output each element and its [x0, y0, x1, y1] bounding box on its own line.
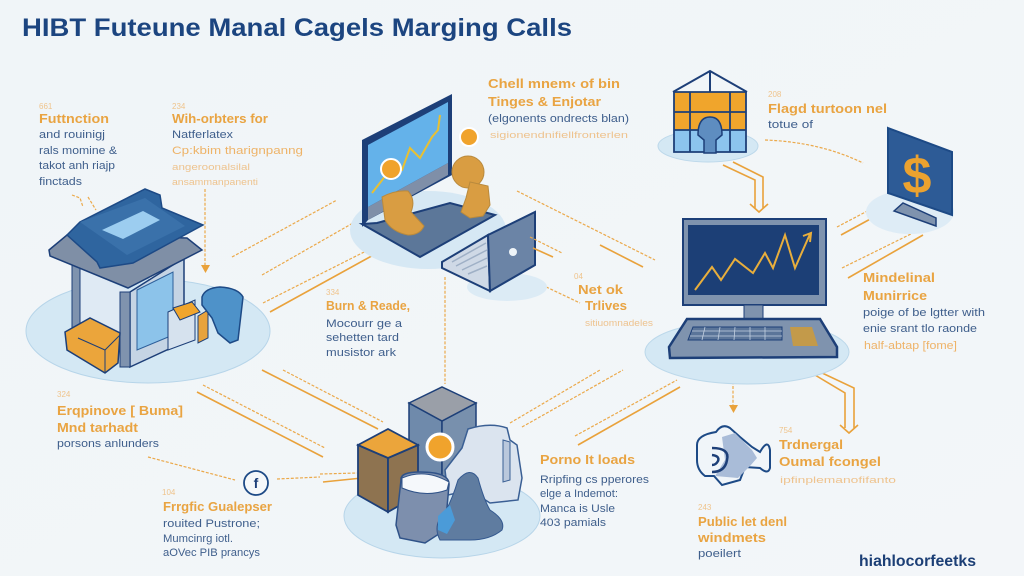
text block: Public let denl: Public let denl: [698, 514, 787, 529]
text block: Porno It loads: [540, 452, 650, 529]
orange parcel: [65, 318, 120, 373]
text block: Futtnction: Futtnction: [39, 111, 109, 126]
coins: [381, 159, 401, 179]
chart line: [695, 233, 811, 290]
text block: Burn and Reade: Burn & Reade,: [326, 298, 410, 313]
text block: Public let denl: windmets: [697, 530, 766, 545]
text block: Burn and Reade: 334: [326, 288, 340, 297]
text block: Net ok: 04: [574, 272, 583, 281]
text block: Flagd turtoon: [768, 90, 887, 131]
panel: kiosk illustration: [26, 189, 270, 383]
text block: Frrgfic Gualepser: Mumcinrg iotl.: [163, 533, 233, 545]
text block: Erqpinove: porsons anlunders: [57, 438, 160, 450]
text block: Frrgfic Gualepser: Frrgfic Gualepser: [163, 499, 272, 514]
text block: Mindelinal: half-abtap [fome]: [864, 340, 957, 352]
text block: Mindelinal: [863, 270, 985, 352]
text block: Futtnction: rals momine &: [39, 145, 118, 157]
platform ellipse: [26, 279, 270, 383]
text block: Net ok: [574, 272, 654, 328]
text block: Flagd turtoon: totue of: [768, 119, 814, 131]
title: HIBT Futeune Manal Cagels Marging Calls: [22, 14, 572, 42]
platform: [350, 191, 506, 269]
text block: Net ok: Net ok: [578, 282, 624, 297]
text block: Frrgfic Gualepser: 104: [162, 488, 176, 497]
text block: Trdnergal: ipfinplemanofifanto: [780, 475, 896, 485]
text block: Wih-orbters: Natferlatex: [172, 129, 234, 141]
kiosk walls: [72, 262, 130, 367]
text block: Flagd turtoon: Flagd turtoon nel: [768, 101, 887, 116]
figures: [382, 191, 424, 235]
logo wordmark: hiahlocorfeetks: [859, 553, 976, 570]
text block: Chell mnem: Chell mnem‹ of bin: [488, 76, 620, 91]
sack: [445, 425, 522, 503]
machine: [168, 300, 195, 350]
text block: Burn and Reade: Mocourr ge a: [326, 318, 403, 330]
text block: Mindelinal: poige of be lgtter with: [863, 307, 985, 319]
text block: Porno It loads: 403 pamials: [540, 517, 607, 529]
text block: Chell mnem: Tinges & Enjotar: [488, 94, 601, 109]
text block: Public let denl: 243: [698, 503, 712, 512]
panel: dollar monitor icon: $: [903, 147, 932, 205]
text block: Public let denl: [697, 503, 787, 560]
icon: pound coin: f: [254, 475, 259, 491]
text block: Flagd turtoon: 208: [768, 90, 782, 99]
text block: Burn and Reade: sehetten tard: [326, 332, 399, 344]
text block: Wih-orbters: ansammanpanenti: [172, 177, 258, 187]
text block: Chell mnem: (elgonents ondrects blan): [488, 113, 629, 125]
text block: Futtnction: takot anh riajp: [39, 160, 115, 172]
panel: top right building icon: [658, 71, 758, 162]
text block: Trdnergal: Trdnergal: [779, 437, 843, 452]
rock pile: [437, 472, 503, 540]
text block: Trdnergal: 754: [779, 426, 793, 435]
orange box: [358, 445, 388, 512]
text block: Public let denl: poeilert: [698, 548, 741, 560]
text block: Trdnergal: Oumal fcongel: [779, 454, 881, 469]
text block: Frrgfic Gualepser: [162, 488, 272, 559]
text block: Porno It loads: elge a Indemot:: [540, 488, 618, 500]
text block: Mindelinal: Mindelinal: [863, 270, 935, 285]
text block: Chell mnem: sigionendnifiellfronterlen: [490, 130, 628, 140]
text block: Net ok: sitiuomnadeles: [585, 318, 654, 328]
text block: Futtnction: [39, 102, 118, 188]
text block: Wih-orbters: 234: [172, 102, 186, 111]
icon: pound coin: [244, 471, 268, 495]
coin: [427, 434, 453, 460]
text block: Porno It loads: Porno It loads: [540, 452, 635, 467]
text block: Chell mnem: [488, 76, 629, 140]
text block: Mindelinal: Munirrice: [863, 288, 927, 303]
text block: Wih-orbters: [172, 102, 303, 187]
text block: Trdnergal: [779, 426, 896, 485]
panel: desktop computer with rising chart: [645, 219, 849, 384]
panel: traders at laptop illustration: [350, 94, 506, 269]
text block: Erqpinove: 324: [57, 390, 71, 399]
text block: Erqpinove: [57, 390, 183, 450]
panel: dollar monitor icon: [866, 128, 954, 234]
text block: Futtnction: finctads: [39, 176, 83, 188]
text block: Erqpinove: Mnd tarhadt: [57, 420, 139, 435]
text block: Wih-orbters: Cp:kbim tharignpanng: [172, 145, 303, 157]
text block: Frrgfic Gualepser: aOVec PIB prancys: [163, 547, 260, 559]
text block: Burn and Reade: [326, 288, 410, 359]
text block: Porno It loads: Manca is Usle: [540, 503, 615, 515]
panel: small laptop: [442, 212, 562, 301]
text block: Wih-orbters: angeroonalsilal: [172, 162, 250, 172]
text block: Mindelinal: enie srant tlo raonde: [863, 323, 977, 335]
big screen: [362, 94, 452, 227]
panel: boxes and containers illustration: [344, 387, 540, 558]
text block: Net ok: Trlives: [585, 298, 627, 313]
chart line: [372, 115, 440, 193]
connector arrows and lines: [72, 140, 923, 482]
text block: Erqpinove: Erqpinove [ Buma]: [57, 403, 183, 418]
text block: Wih-orbters: Wih-orbters for: [172, 111, 268, 126]
text block: Frrgfic Gualepser: rouited Pustrone;: [163, 518, 260, 530]
gray box: [409, 403, 442, 490]
kiosk roof: [49, 235, 202, 288]
text block: Futtnction: 661: [39, 102, 53, 111]
bucket: [396, 472, 449, 543]
text block: Futtnction: and rouinigj: [39, 129, 105, 141]
base: [362, 203, 495, 257]
text block: Porno It loads: Rripfing cs pperores: [540, 474, 650, 486]
text block: Burn and Reade: musistor ark: [326, 347, 397, 359]
icon: valve with dollar sign: [697, 426, 770, 485]
